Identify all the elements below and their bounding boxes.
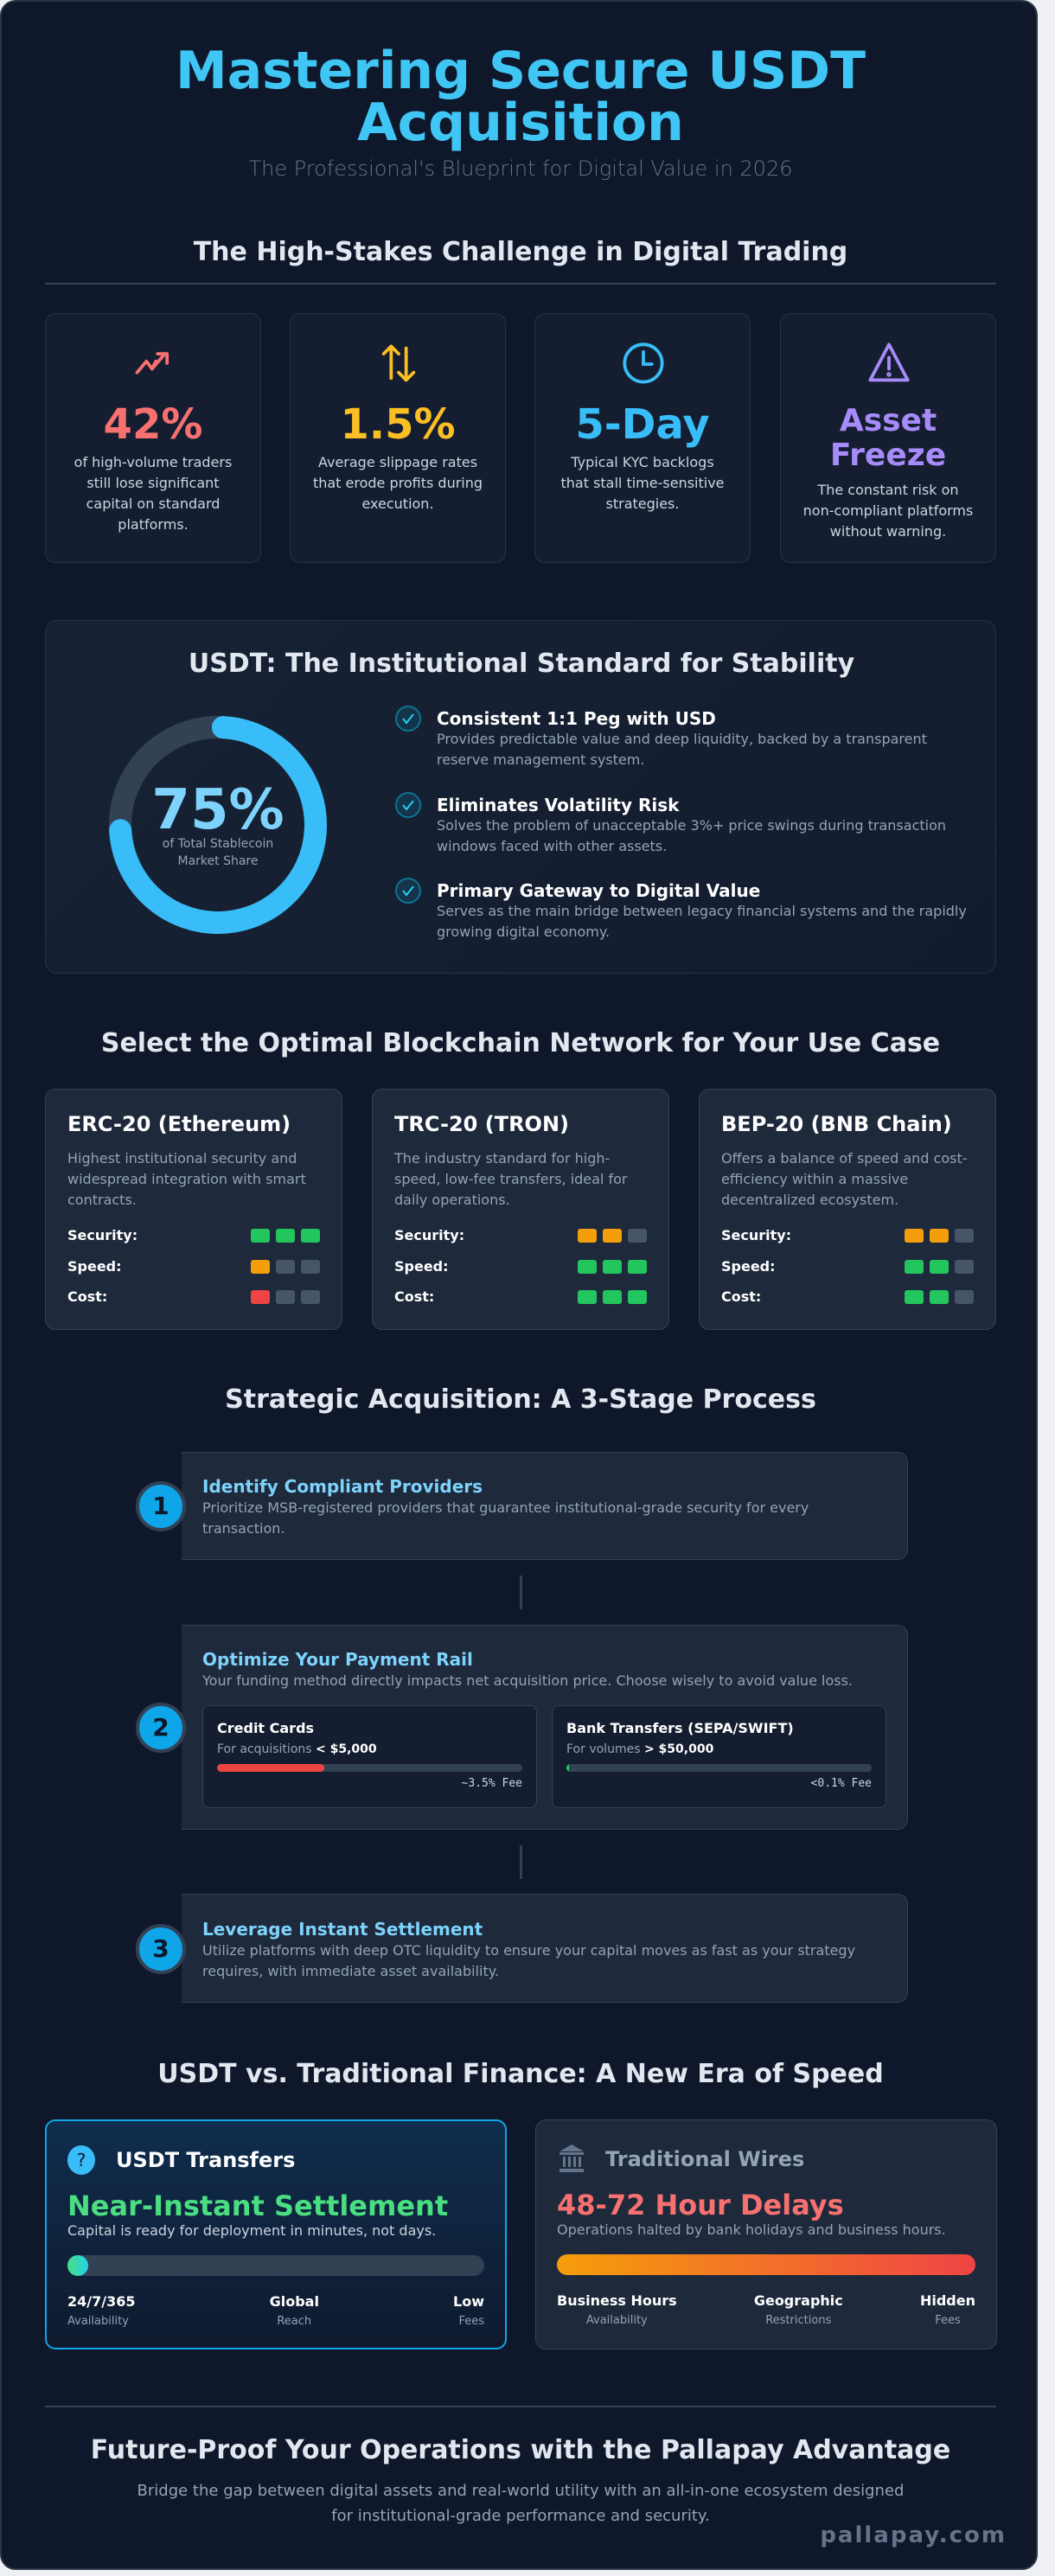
card: traditional wires: Business Hours [557, 2292, 677, 2309]
stat card: 5-Day: 5-Day [575, 400, 710, 449]
card: traditional wires: Traditional Wires [605, 2147, 804, 2171]
panel: stability [45, 620, 996, 974]
check item 2 [395, 792, 946, 854]
sub card: credit cards [202, 1705, 537, 1808]
check item 1: Consistent 1:1 Peg with USD [437, 708, 716, 729]
icon: question: ? [77, 2150, 86, 2170]
check item 3: Serves as the main bridge between legacy financial systems and the rapidly growing digital economy. [437, 903, 967, 940]
donut chart [109, 716, 327, 934]
stat card: 42%: of high-volume traders still lose significant capital on standard platforms. [74, 454, 232, 533]
step 1 number: 1 [152, 1492, 169, 1520]
donut chart: of Total Stablecoin [163, 837, 273, 851]
icon: question [67, 2145, 95, 2175]
step 2: Your funding method directly impacts net acquisition price. Choose wisely to avoid value loss. [202, 1672, 853, 1689]
card: traditional wires: Geographic [754, 2292, 843, 2309]
step 1 number [136, 1481, 186, 1531]
step 1 [182, 1452, 908, 1560]
card: USDT transfers: Low [453, 2293, 484, 2310]
stat card: 1.5%: Average slippage rates that erode profits during execution. [313, 454, 483, 512]
network card: ERC-20: ERC-20 (Ethereum) [67, 1112, 291, 1136]
network card: ERC-20: Highest institutional security and widespread integration with smart contracts. [67, 1150, 306, 1208]
network card: BEP-20: Offers a balance of speed and cost-efficiency within a massive decentralized ecosystem. [721, 1150, 968, 1208]
check item 2: Solves the problem of unacceptable 3%+ price swings during transaction windows faced with other assets. [437, 817, 946, 854]
stat card: Asset Freeze: The constant risk on non-compliant platforms without warning. [803, 482, 973, 540]
step 3: Utilize platforms with deep OTC liquidity to ensure your capital moves as fast as your strategy requires, with immediate asset availability. [202, 1942, 855, 1979]
card: traditional wires: Fees [935, 2314, 961, 2327]
sub card: bank transfers [552, 1705, 886, 1808]
network card: TRC-20: TRC-20 (TRON) [394, 1112, 569, 1136]
card: USDT transfers [45, 2119, 507, 2349]
icon: arrows [382, 344, 415, 382]
card: USDT transfers: Fees [458, 2315, 484, 2328]
network card: TRC-20: The industry standard for high-speed, low-fee transfers, ideal for daily operations. [394, 1150, 627, 1208]
heading: challenge: The High-Stakes Challenge in Digital Trading [194, 237, 847, 267]
card: traditional wires: Availability [586, 2314, 648, 2327]
sub card: bank transfers: For volumes > $50,000 [566, 1742, 713, 1756]
card: USDT transfers: Near-Instant Settlement [67, 2189, 448, 2222]
network card: BEP-20: Security: [721, 1227, 791, 1243]
network card: BEP-20: Cost: [721, 1288, 761, 1305]
network card: TRC-20 [372, 1089, 669, 1330]
heading: comparison: USDT vs. Traditional Finance: A New Era of Speed [157, 2059, 884, 2089]
icon: warning [868, 342, 910, 382]
step 3: Leverage Instant Settlement [202, 1919, 483, 1940]
sub card: bank transfers: <0.1% Fee [811, 1777, 872, 1790]
card: traditional wires: Restrictions [765, 2314, 831, 2327]
card: USDT transfers: Availability [67, 2315, 129, 2328]
sub card: credit cards: Credit Cards [217, 1720, 314, 1736]
sub card: credit cards: For acquisitions < $5,000 [217, 1742, 377, 1756]
stat card: Asset Freeze: Asset [840, 403, 937, 438]
stat card: 42% [45, 313, 261, 563]
network card: TRC-20: Security: [394, 1227, 464, 1243]
step 3 number [136, 1924, 186, 1974]
stat card: 1.5%: 1.5% [340, 400, 456, 449]
network card: BEP-20: BEP-20 (BNB Chain) [721, 1112, 952, 1136]
stat card: 1.5% [290, 313, 506, 563]
stat card: Asset Freeze: Freeze [830, 438, 946, 473]
check item 3: Primary Gateway to Digital Value [437, 880, 760, 901]
network card: BEP-20 [699, 1089, 996, 1330]
network card: ERC-20: Cost: [67, 1288, 107, 1305]
sub card: credit cards: ~3.5% Fee [462, 1777, 522, 1790]
network card: ERC-20: Speed: [67, 1258, 122, 1275]
title [176, 41, 866, 153]
title: Mastering Secure USDT [176, 41, 866, 101]
step 1: Prioritize MSB-registered providers that guarantee institutional-grade security for every transaction. [202, 1499, 809, 1537]
icon: bank [559, 2145, 584, 2172]
card: traditional wires [535, 2119, 997, 2349]
step 2 number [136, 1703, 186, 1753]
step 2 number: 2 [152, 1713, 169, 1742]
card: USDT transfers: Reach [277, 2315, 311, 2328]
card: traditional wires: 48-72 Hour Delays [557, 2189, 844, 2221]
network card: BEP-20: Speed: [721, 1258, 776, 1275]
heading: process: Strategic Acquisition: A 3-Stage Process [225, 1384, 816, 1415]
brand: pallapay.com [820, 2522, 1007, 2548]
title: Acquisition [357, 93, 684, 153]
card: traditional wires: Hidden [920, 2292, 975, 2309]
icon: clock [623, 342, 664, 384]
check item 3 [395, 878, 967, 940]
heading: USDT: The Institutional Standard for Stability [189, 649, 854, 679]
card: USDT transfers: 24/7/365 [67, 2293, 135, 2310]
check item 1: Provides predictable value and deep liquidity, backed by a transparent reserve management system. [437, 731, 927, 768]
step 2: Optimize Your Payment Rail [202, 1649, 473, 1670]
heading: final CTA: Future-Proof Your Operations with the Pallapay Advantage [91, 2435, 950, 2465]
network card: TRC-20: Cost: [394, 1288, 434, 1305]
stat card: 42%: 42% [104, 400, 202, 449]
donut chart: 75% [151, 778, 285, 842]
stat card: 5-Day: Typical KYC backlogs that stall time-sensitive strategies. [560, 454, 725, 512]
network card: TRC-20: Speed: [394, 1258, 449, 1275]
step 3 number: 3 [152, 1934, 169, 1963]
donut chart: Market Share [178, 854, 258, 868]
step 2 [182, 1625, 908, 1830]
card: USDT transfers: Capital is ready for deployment in minutes, not days. [67, 2222, 436, 2239]
stat card: Asset Freeze [780, 313, 996, 563]
check item 2: Eliminates Volatility Risk [437, 795, 679, 815]
heading: networks: Select the Optimal Blockchain Network for Your Use Case [101, 1028, 940, 1058]
step 1: Identify Compliant Providers [202, 1476, 483, 1497]
closing text: Bridge the gap between digital assets and real-world utility with an all-in-one ecosystem designed for institutional-grade performance and security. [137, 2482, 904, 2525]
network card: ERC-20 [45, 1089, 342, 1330]
check item 1 [395, 706, 927, 768]
network card: ERC-20: Security: [67, 1227, 137, 1243]
step 3 [182, 1894, 908, 2003]
sub card: bank transfers: Bank Transfers (SEPA/SWIFT) [566, 1720, 794, 1736]
card: traditional wires: Operations halted by bank holidays and business hours. [557, 2221, 946, 2238]
card: USDT transfers: Global [270, 2293, 319, 2310]
card: USDT transfers: USDT Transfers [116, 2148, 295, 2172]
stat card: 5-Day [534, 313, 751, 563]
icon: trend [135, 352, 169, 374]
subtitle: The Professional's Blueprint for Digital Value in 2026 [249, 157, 792, 181]
